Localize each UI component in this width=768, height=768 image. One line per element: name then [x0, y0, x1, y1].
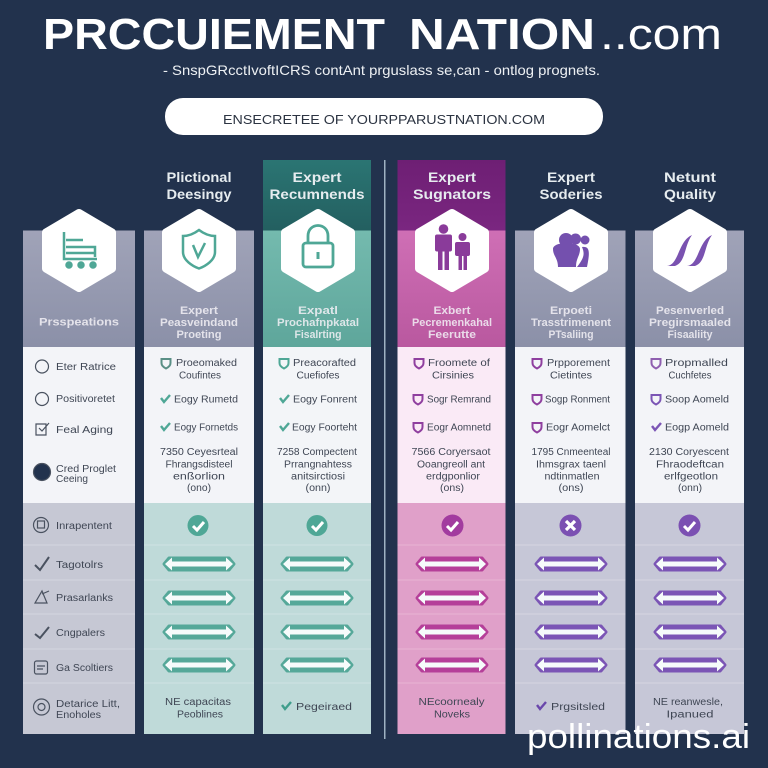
column heading: Expert: [292, 169, 342, 185]
panel: column 4 magenta: (ons): [440, 483, 464, 494]
panel: column 3 teal: Eogy Foorteht: [292, 422, 357, 434]
panel: column 4 magenta: Pecremenkahal: [412, 317, 492, 329]
panel: column 3 teal: anitsirctiosi: [291, 472, 345, 482]
panel: column 1 labels: Ga Scoltiers: [56, 663, 113, 674]
panel: column 2: Expert: [180, 305, 218, 317]
panel: column 1 labels: Feal Aging: [56, 425, 113, 436]
panel: column 2: Eogy Rumetd: [174, 394, 238, 406]
panel: column 6 purple: Pregirsmaaled: [649, 317, 731, 329]
panel: column 4 magenta: Eogr Aomnetd: [427, 422, 491, 434]
icon: cart chart: [64, 232, 97, 268]
icon: people: [435, 224, 470, 270]
watermark: pollinations.ai: [527, 718, 750, 756]
panel: column 4 magenta: Feerutte: [428, 329, 476, 341]
column heading: Sugnators: [413, 186, 491, 202]
panel: column 6 purple: (onn): [678, 483, 702, 494]
panel: column 4 magenta: Exbert: [434, 305, 471, 317]
column heading: Soderies: [540, 186, 603, 202]
panel: column 3 teal: Fisalrting: [294, 329, 342, 341]
panel: column 1 labels: Positivoretet: [56, 394, 115, 405]
panel: column 5 purple: Sogp Ronment: [545, 394, 610, 406]
panel: column 1 labels: [23, 213, 135, 734]
panel: column 1 labels: Detarice Litt,: [56, 699, 120, 710]
panel: column 5 purple: [515, 169, 626, 734]
panel: column 4 magenta: Cirsinies: [432, 370, 474, 382]
panel: column 3 teal: Preacorafted: [293, 358, 356, 369]
panel: column 2: NE capacitas: [165, 697, 231, 708]
icon: padlock: [303, 226, 333, 267]
column heading: Quality: [664, 186, 716, 202]
panel: column 6 purple: Fisaaliity: [668, 329, 713, 341]
column heading: Expert: [428, 169, 476, 185]
check badge: [188, 515, 208, 536]
panel: column 1 labels: Tagotolrs: [56, 560, 103, 571]
panel: column 2: Peoblines: [177, 710, 223, 720]
panel: column 4 magenta: NEcoornealy: [418, 697, 484, 708]
row icons: [34, 360, 50, 715]
icon: group: [553, 233, 590, 267]
icon: double slash: [667, 235, 712, 266]
title: ..com: [600, 10, 722, 59]
panel: column 4 magenta: Noveks: [434, 710, 470, 720]
panel: column 6 purple: Propmalled: [665, 358, 728, 369]
column heading: Expert: [547, 169, 595, 185]
panel: column 2: 7350 Ceyesrteal: [160, 447, 238, 458]
panel: column 4 magenta: Sogr Remrand: [427, 394, 491, 406]
panel: column 3 teal: 7258 Compectent: [277, 447, 357, 458]
panel: column 3 teal: Expatl: [298, 305, 338, 317]
title: [43, 10, 722, 59]
column heading: Recumnends: [270, 186, 365, 202]
panel: column 3 teal: Cuefiofes: [296, 370, 340, 382]
panel: column 6 purple: Ipanued: [666, 710, 714, 720]
panel: column 1 labels: Prasarlanks: [56, 593, 113, 604]
panel: column 1 labels: Cngpalers: [56, 628, 105, 639]
subtitle: - SnspGRcctIvoftICRS contAnt prguslass se,can - ontlog prognets.: [163, 62, 600, 78]
panel: column 4 magenta: 7566 Coryersaot: [412, 447, 491, 458]
check badge: [306, 515, 328, 536]
panel: column 2: Proeting: [176, 329, 222, 341]
panel: column 2: Eogy Fornetds: [174, 422, 238, 434]
panel: column 3 teal: Pegeiraed: [296, 702, 352, 713]
panel: column 5 purple: Trasstrimenent: [531, 317, 611, 329]
title: NATION: [409, 10, 595, 59]
column heading: Netunt: [664, 169, 716, 185]
panel: column 6 purple: Soop Aomeld: [665, 394, 729, 406]
panel: column 2: Fhrangsdisteel: [166, 460, 232, 470]
panel: column 5 purple: 1795 Cnmeenteal: [532, 447, 610, 458]
panel: column 2: Proeomaked: [176, 358, 237, 369]
panel: column 4 magenta: erdgponlior: [426, 472, 481, 482]
panel: column 2: Peasveindand: [160, 317, 238, 329]
panel: column 5 purple: Cietintes: [550, 370, 592, 382]
panel: column 3 teal: Prrangnahtess: [284, 460, 352, 470]
panel: column 4 magenta: Ooangreoll ant: [417, 460, 485, 470]
panel: column 5 purple: Prgsitsled: [551, 702, 605, 713]
panel: column 5 purple: Ihmsgrax taenl: [536, 460, 606, 470]
cross badge: [560, 514, 582, 536]
panel: column 6 purple: 2130 Coryescent: [649, 447, 729, 458]
panel: column 2: [144, 169, 254, 734]
panel: column 2: (ono): [187, 483, 211, 494]
panel: column 6 purple: [635, 169, 744, 734]
panel: column 5 purple: (ons): [558, 483, 584, 494]
panel: column 3 teal: Prochafnpkatal: [277, 317, 359, 329]
panel: column 5 purple: Erpoeti: [550, 305, 592, 317]
search pill: ENSECRETEE OF YOURPPARUSTNATION.COM: [223, 113, 545, 127]
panel: column 6 purple: Eogp Aomeld: [665, 422, 729, 434]
panel: column 3 teal: Eogy Fonrent: [293, 394, 357, 406]
panel: column 2: Coufintes: [179, 370, 221, 382]
panel: column 5 purple: Prpporement: [547, 358, 610, 369]
column heading: Deesingy: [166, 186, 232, 202]
check badge: [678, 514, 700, 536]
panel: column 5 purple: ndtinmatlen: [544, 472, 600, 482]
panel: column 5 purple: PTsaliing: [548, 329, 594, 341]
panel: column 3 teal: (onn): [306, 483, 330, 494]
panel: column 5 purple: Eogr Aomelct: [546, 422, 610, 434]
panel: column 1 labels: Ceeing: [56, 474, 88, 485]
panel: column 1 labels: Eter Ratrice: [56, 362, 116, 373]
panel: column 6 purple: Fhraodeftcan: [656, 460, 724, 470]
panel: column 1 labels: Cred Proglet: [56, 464, 116, 475]
panel: column 6 purple: Pesenverled: [656, 305, 724, 317]
panel: column 4 magenta: [398, 160, 506, 734]
panel: column 6 purple: erlfgeotlon: [664, 472, 718, 482]
title: PRCCUIEMENT: [43, 10, 385, 59]
panel: column 1 labels: Prsspeations: [39, 316, 119, 328]
icon: shield: [183, 230, 215, 268]
divider: [384, 160, 386, 739]
panel: column 3 teal: [263, 160, 371, 734]
check badge: [442, 514, 464, 536]
panel: column 1 labels: Inrapentent: [56, 521, 112, 532]
panel: column 6 purple: Cuchfetes: [668, 370, 712, 382]
panel: column 4 magenta: Froomete of: [428, 358, 490, 369]
column heading: Plictional: [166, 169, 232, 185]
search pill: [165, 98, 603, 135]
panel: column 2: enßorlion: [173, 472, 225, 482]
panel: column 6 purple: NE reanwesle,: [653, 697, 723, 708]
panel: column 1 labels: Enoholes: [56, 710, 101, 721]
